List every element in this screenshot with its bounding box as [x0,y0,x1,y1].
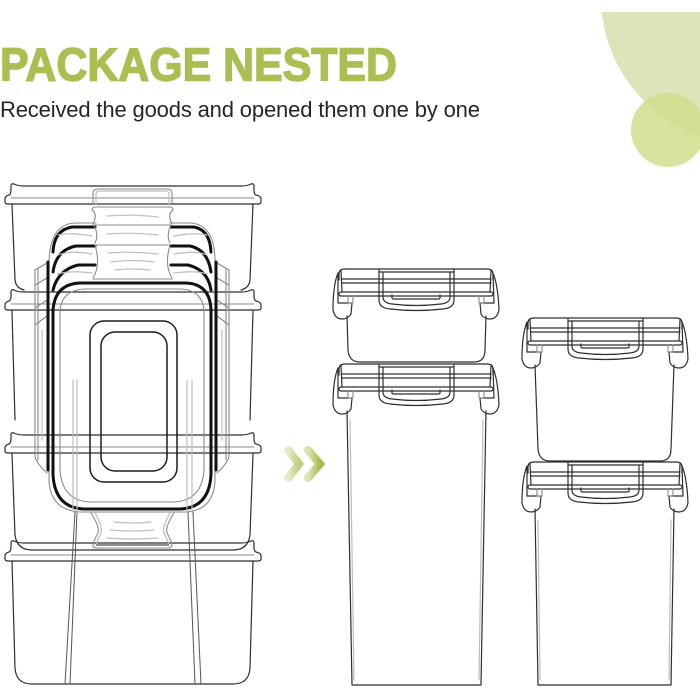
container: large, right column [522,462,688,685]
subtitle: Received the goods and opened them one by one [0,97,480,122]
lids [5,184,261,561]
decorative small circle [631,93,700,167]
container: tall, left column [333,364,499,685]
nested rings [48,223,216,512]
inner rounded rectangles [90,321,177,482]
box bodies [12,204,253,684]
arrows [288,450,320,478]
nested containers stack [5,184,261,684]
side tabs [35,263,229,473]
container: small square, left column [333,269,499,362]
decorative large circle [602,12,700,136]
container: medium, right column [522,318,688,461]
title: PACKAGE NESTED [0,38,397,90]
lower vertical lines [65,380,201,684]
handles [91,189,174,548]
